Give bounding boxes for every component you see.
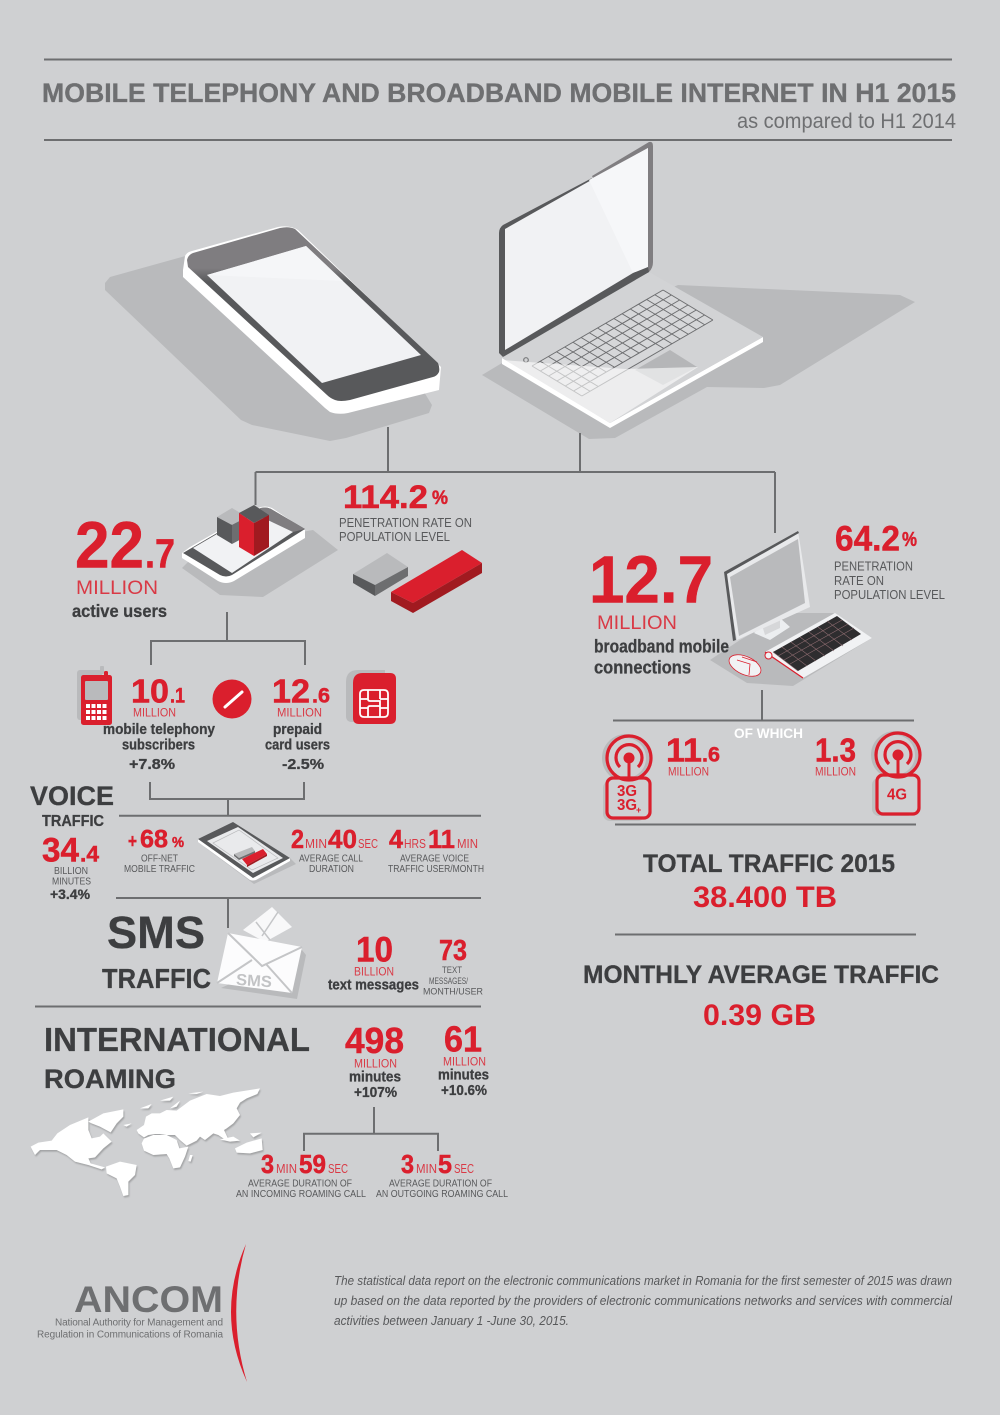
stat: 61 million minutes: [438, 1018, 489, 1099]
stat: total traffic: TOTAL TRAFFIC 2015: [643, 850, 895, 878]
stat: 73 messages per month per user: TEXT: [442, 965, 462, 976]
stat: 1.3 million: 1.3: [815, 732, 856, 768]
footer logo: ANCOM: Regulation in Communications of Romania: [37, 1330, 223, 1341]
world map: [31, 1088, 263, 1196]
icon: divider slash: [212, 680, 252, 718]
stat: 22.7 million active users: 22: [75, 508, 144, 582]
illustration: smartphone: [105, 226, 441, 441]
stat: outgoing roaming call duration: SEC: [454, 1162, 474, 1176]
stat: 34.4 billion minutes: 34: [42, 832, 79, 870]
stat: 61 million minutes: minutes: [438, 1068, 489, 1084]
stat: monthly average traffic: 0.39 GB: [703, 999, 816, 1032]
panel: international roaming: [31, 1018, 508, 1200]
heading: roaming: ROAMING: [44, 1064, 176, 1094]
stat: incoming roaming call duration: SEC: [328, 1162, 348, 1176]
stat: outgoing roaming call duration: AN OUTGOING ROAMING CALL: [376, 1189, 508, 1200]
stat: 11.6 million: .6: [702, 744, 720, 766]
icon: SIM card: [346, 670, 396, 724]
stat: 114.2% penetration rate: POPULATION LEVEL: [339, 530, 450, 544]
stat: 12.6 million prepaid: prepaid: [273, 722, 322, 738]
stat: 22.7 million active users: [72, 508, 175, 621]
stat: outgoing roaming call duration: 3: [401, 1149, 414, 1179]
icon: 4G antenna: 4G: [887, 786, 907, 804]
stat: 73 messages per month per user: MONTH/USER: [423, 986, 483, 998]
laptop screen: [499, 178, 596, 357]
heading: international: INTERNATIONAL: [44, 1021, 310, 1058]
icon: mobile phone: [77, 666, 112, 725]
tree connector: devices to categories: [256, 427, 775, 533]
panel: subscribers and prepaid: [77, 666, 396, 773]
stat: 64.2% penetration rate: 64.2: [835, 520, 900, 558]
stat: +68% off-net: +: [128, 832, 137, 852]
title: MOBILE TELEPHONY AND BROADBAND MOBILE INTERNET IN H1 2015: [42, 78, 956, 108]
stat: 61 million minutes: +10.6%: [441, 1083, 487, 1099]
stat: 22.7 million active users: active users: [72, 601, 167, 621]
stat: 34.4 billion minutes: .4: [80, 842, 100, 866]
stat: +68% off-net: [124, 826, 195, 875]
stat: average call duration: AVERAGE CALL: [299, 854, 363, 865]
panel: active users: [72, 479, 482, 621]
stat: outgoing roaming call duration: [376, 1149, 508, 1200]
stat: average call duration: 2: [291, 824, 304, 854]
stat: average voice traffic per user: 4: [389, 824, 404, 854]
stat: 498 million minutes: MILLION: [354, 1056, 397, 1070]
divider: voice to sms: [116, 898, 481, 928]
tree connector: of which: [613, 690, 914, 720]
footer logo: ANCOM: ANCOM: [74, 1279, 223, 1320]
stat: 61 million minutes: MILLION: [443, 1055, 486, 1069]
heading: traffic: TRAFFIC: [102, 963, 211, 994]
footnote paragraph: activities between January 1 -June 30, 2015.: [334, 1314, 569, 1328]
stat: 34.4 billion minutes: +3.4%: [50, 886, 91, 902]
footnote paragraph: The statistical data report on the electronic communications market in Romania for the first semester of 2015 was drawn: [334, 1274, 952, 1288]
panel: broadband mobile connections: [583, 520, 945, 1032]
icon: 3G antenna: [603, 736, 651, 821]
stat: 12.7 million connections: [589, 542, 729, 678]
stat: 61 million minutes: 61: [444, 1018, 482, 1060]
tree connector: into voice: [150, 782, 304, 815]
stat: total traffic: [643, 850, 895, 914]
stat: incoming roaming call duration: 59: [299, 1149, 326, 1179]
stat: average call duration: 40: [328, 824, 357, 854]
stat: 1.3 million: MILLION: [815, 765, 856, 779]
icon: envelopes: [217, 907, 306, 999]
icon: 3G antenna: 3G: [617, 783, 637, 800]
stat: 114.2% penetration rate: 114.2: [343, 479, 428, 515]
laptop keyboard: [532, 290, 713, 396]
stat: 22.7 million active users: .7: [145, 530, 175, 576]
title block: [42, 60, 956, 140]
stat: monthly average traffic: [583, 961, 939, 1032]
stat: 114.2% penetration rate: [339, 479, 472, 544]
footer logo: ANCOM: [37, 1244, 247, 1382]
stat: 10.1 million subscribers: +7.8%: [129, 756, 175, 773]
stat: average voice traffic per user: TRAFFIC USER/MONTH: [388, 864, 484, 875]
stat: 114.2% penetration rate: %: [432, 488, 448, 509]
stat: 22.7 million active users: MILLION: [76, 578, 158, 599]
stat: 10.1 million subscribers: subscribers: [122, 738, 195, 754]
stat: average voice traffic per user: HRS: [404, 837, 426, 851]
icon: tablet: [198, 822, 296, 884]
stat: 34.4 billion minutes: [42, 832, 100, 902]
stat: 12.6 million prepaid: 12: [272, 672, 310, 710]
stat: outgoing roaming call duration: 5: [438, 1149, 452, 1179]
heading: voice: VOICE: [30, 781, 114, 811]
divider: voice top: [119, 815, 481, 817]
stat: incoming roaming call duration: [236, 1149, 366, 1200]
stat: 12.7 million connections: MILLION: [597, 613, 677, 634]
stat: 10.1 million subscribers: .1: [170, 684, 185, 708]
stat: 73 messages per month per user: MESSAGES/: [429, 976, 468, 987]
stat: monthly average traffic: MONTHLY AVERAGE TRAFFIC: [583, 961, 939, 989]
icon: desktop computer: [710, 531, 872, 686]
stat: total traffic: 38.400 TB: [693, 881, 837, 914]
stat: 73 messages per month per user: [423, 935, 483, 998]
tree connector: roaming durations: [304, 1107, 438, 1151]
stat: 498 million minutes: [345, 1020, 404, 1101]
stat: average call duration: DURATION: [309, 864, 354, 875]
stat: average call duration: [291, 824, 378, 875]
stat: 12.6 million prepaid: .6: [312, 684, 330, 708]
stat: average voice traffic per user: AVERAGE VOICE: [400, 854, 469, 865]
stat: 11.6 million: 11: [666, 732, 702, 768]
tree connector: active users split: [151, 612, 305, 665]
palm rest gloss: [502, 360, 698, 423]
footnote paragraph: [334, 1274, 953, 1328]
stat: 64.2% penetration rate: RATE ON: [834, 574, 884, 588]
stat: +68% off-net: %: [172, 834, 184, 851]
stat: 12.6 million prepaid: card users: [265, 738, 330, 754]
stat: 64.2% penetration rate: PENETRATION: [834, 560, 913, 574]
stat: 73 messages per month per user: 73: [439, 935, 467, 967]
footnote paragraph: up based on the data reported by the providers of electronic communications networks and services with commercial: [334, 1294, 953, 1308]
stat: average call duration: MIN: [305, 837, 327, 851]
stat: average voice traffic per user: MIN: [457, 837, 478, 851]
stat: 114.2% penetration rate: PENETRATION RATE ON: [339, 516, 472, 530]
panel: voice traffic: [30, 781, 484, 902]
stat: outgoing roaming call duration: MIN: [416, 1162, 437, 1176]
stat: 11.6 million: [666, 732, 720, 779]
stat: average voice traffic per user: [388, 824, 484, 875]
stat: average call duration: SEC: [358, 837, 378, 851]
icon: envelopes: SMS: [235, 972, 273, 991]
illustration: laptop: [482, 142, 915, 439]
stat: 64.2% penetration rate: %: [902, 529, 917, 551]
heading: sms: SMS: [107, 907, 205, 958]
icon: 3G antenna: 3G: [617, 797, 637, 814]
stat: +68% off-net: OFF-NET: [141, 854, 178, 865]
laptop base: [502, 337, 763, 428]
divider: sms to roaming: [35, 1006, 481, 1008]
heading: traffic: TRAFFIC: [42, 813, 104, 830]
stat: 12.7 million connections: broadband mobile: [594, 636, 729, 656]
stat: 12.7 million connections: 12.7: [589, 542, 713, 618]
stat: 34.4 billion minutes: MINUTES: [52, 876, 91, 888]
stat: 10.1 million subscribers: mobile telephony: [103, 722, 215, 738]
stat: 10 billion text messages: [328, 930, 419, 994]
stat: 10 billion text messages: BILLION: [354, 965, 394, 979]
stat: 12.6 million prepaid: -2.5%: [282, 756, 324, 773]
divider: traffic top: [615, 824, 916, 826]
stat: 12.6 million prepaid: [265, 672, 330, 773]
subtitle: as compared to H1 2014: [737, 110, 956, 133]
stat: 10.1 million subscribers: MILLION: [133, 706, 176, 720]
stat: incoming roaming call duration: AVERAGE DURATION OF: [248, 1178, 352, 1190]
stat: 12.6 million prepaid: MILLION: [277, 706, 322, 720]
stat: incoming roaming call duration: MIN: [276, 1162, 297, 1176]
divider: traffic middle: [615, 934, 916, 936]
stat: 64.2% penetration rate: POPULATION LEVEL: [834, 588, 945, 602]
stat: +68% off-net: 68: [140, 826, 168, 854]
icon: 3G antenna: +: [636, 805, 641, 815]
stat: 10 billion text messages: 10: [356, 930, 393, 970]
icon: 4G antenna: [872, 733, 920, 816]
stat: 498 million minutes: 498: [345, 1020, 404, 1061]
stat: 64.2% penetration rate: [834, 520, 945, 602]
stat: incoming roaming call duration: AN INCOMING ROAMING CALL: [236, 1189, 366, 1200]
stat: 10.1 million subscribers: 10: [131, 672, 169, 710]
stat: +68% off-net: MOBILE TRAFFIC: [124, 864, 195, 875]
footer logo: ANCOM: National Authority for Management and: [55, 1318, 223, 1329]
stat: 10 billion text messages: text messages: [328, 978, 419, 994]
icon: phone with two blocks: [182, 505, 338, 597]
icon: comparison blocks: [353, 550, 482, 613]
stat: 34.4 billion minutes: BILLION: [54, 866, 88, 877]
stat: 498 million minutes: minutes: [349, 1070, 401, 1086]
label: of which: OF WHICH: [734, 726, 803, 741]
panel: sms traffic: [102, 907, 483, 999]
stat: outgoing roaming call duration: AVERAGE DURATION OF: [389, 1178, 492, 1190]
stat: average voice traffic per user: 11: [428, 824, 455, 854]
stat: 498 million minutes: +107%: [354, 1085, 397, 1101]
stat: 12.7 million connections: connections: [594, 658, 691, 678]
stat: 10.1 million subscribers: [103, 672, 215, 773]
stat: 11.6 million: MILLION: [668, 765, 709, 779]
stat: incoming roaming call duration: 3: [261, 1149, 274, 1179]
